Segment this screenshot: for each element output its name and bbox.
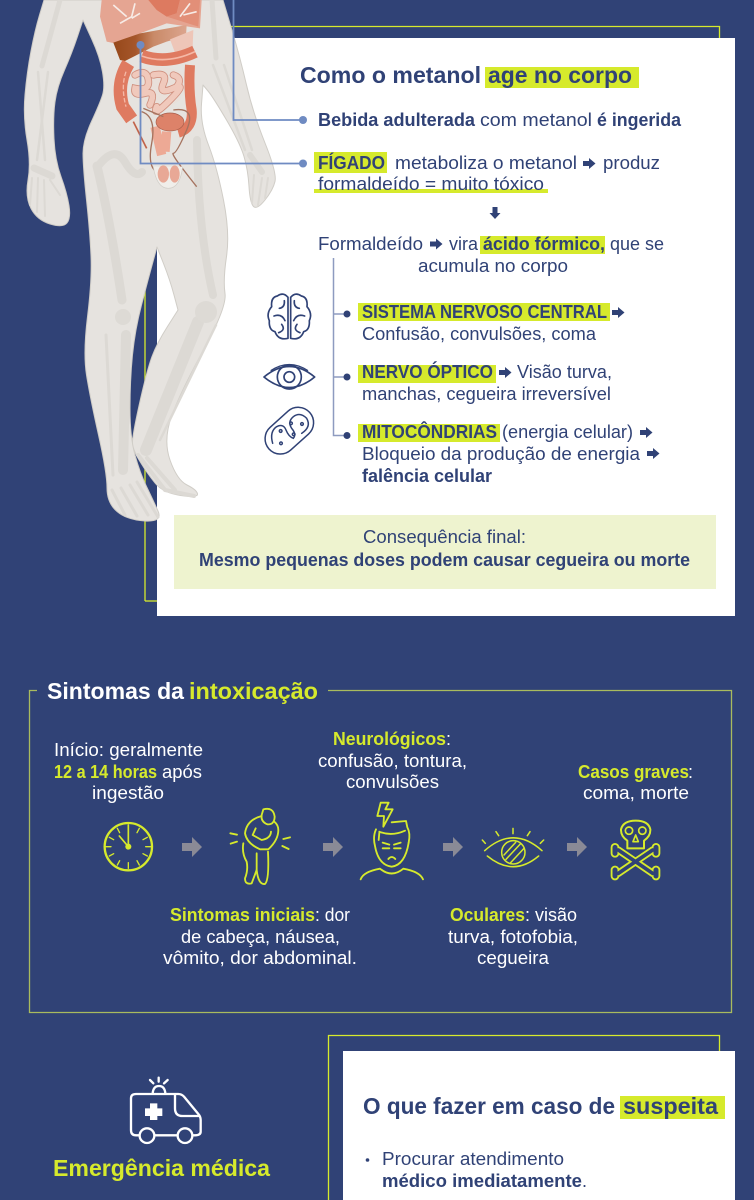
connector lines from organs to text	[136, 0, 307, 168]
text: initial symptoms	[163, 905, 357, 968]
heading: Sintomas da intoxicação: intoxicação	[189, 678, 318, 704]
callout: final consequence: Mesmo pequenas doses podem causar cegueira ou morte	[199, 550, 690, 570]
text: optic nerve: manchas, cegueira irreversível	[362, 384, 611, 404]
text: liver metabolises methanol: metaboliza o metanol	[395, 153, 577, 173]
icon: head with lightning	[361, 803, 423, 879]
text: initial symptoms: vômito, dor abdominal.	[163, 948, 357, 968]
text: initial symptoms: Sintomas iniciais	[170, 905, 315, 925]
text: initial symptoms: de cabeça, náusea,	[181, 927, 340, 947]
icon: eye	[264, 364, 315, 389]
icon: brain	[268, 294, 311, 339]
text: onset: Início: geralmente	[54, 740, 203, 760]
panel: symptoms frame	[30, 690, 732, 1012]
heading: Sintomas da intoxicação: Sintomas da	[47, 678, 184, 704]
text: ocular symptoms: : visão	[525, 905, 577, 925]
organs	[100, 0, 202, 188]
heading: Como o metanol age no corpo	[300, 62, 639, 88]
text: ocular symptoms: turva, fotofobia,	[448, 927, 578, 947]
text: mitochondria	[358, 421, 660, 486]
text: optic nerve: Visão turva,	[517, 362, 612, 382]
text: ingestion: com metanol	[480, 110, 592, 130]
list item: seek medical care	[366, 1149, 587, 1191]
text: severe cases	[578, 762, 693, 803]
heading: what to do in case of suspicion: suspeita	[623, 1093, 718, 1119]
arrow: step 3	[443, 837, 463, 857]
icon: skull and crossbones	[615, 821, 656, 876]
text: formic acid: ácido fórmico,	[483, 234, 605, 254]
text: optic nerve: NERVO ÓPTICO	[362, 361, 493, 382]
icon: eye with impaired vision	[482, 828, 544, 867]
text: optic nerve	[358, 361, 612, 404]
heading: Como o metanol age no corpo: age no corpo	[488, 62, 632, 88]
text: formic acid	[318, 234, 664, 276]
text: neurological symptoms	[318, 729, 467, 792]
text: ocular symptoms: Oculares	[450, 905, 525, 925]
text: ocular symptoms	[448, 905, 578, 968]
text: mitochondria: MITOCÔNDRIAS	[362, 421, 497, 442]
icon: mitochondrion	[259, 401, 320, 460]
heading: Emergência médica: Emergência médica	[53, 1155, 270, 1181]
branching connector to affected systems	[334, 258, 350, 439]
icon: clock	[105, 823, 152, 870]
arrow: step 2	[323, 837, 343, 857]
text: ingestion: Bebida adulterada	[318, 110, 476, 130]
text: initial symptoms: : dor	[315, 905, 350, 925]
panel: what to do	[328, 1036, 735, 1200]
text: onset: ingestão	[92, 783, 164, 803]
text: liver metabolises methanol: FÍGADO	[318, 152, 385, 173]
callout: final consequence: Consequência final:	[363, 527, 526, 547]
text: severe cases: coma, morte	[583, 783, 689, 803]
heading: what to do in case of suspicion: O que fazer em caso de	[363, 1093, 615, 1119]
list item: seek medical care: médico imediatamente	[382, 1171, 582, 1191]
text: mitochondria: Bloqueio da produção de energia	[362, 444, 641, 464]
arrow: step 4	[567, 837, 587, 857]
list item: seek medical care: Procurar atendimento	[382, 1149, 564, 1169]
text: central nervous system	[358, 302, 624, 344]
text: onset: 12 a 14 horas	[54, 762, 157, 782]
text: central nervous system: SISTEMA NERVOSO CENTRAL	[362, 302, 607, 322]
text: mitochondria: falência celular	[362, 466, 492, 486]
heading: Como o metanol age no corpo: Como o metanol	[300, 62, 481, 88]
illustration: human body with skeleton and organs	[24, 0, 275, 521]
text: neurological symptoms: :	[446, 729, 451, 749]
bones	[30, 0, 268, 517]
text: central nervous system: Confusão, convulsões, coma	[362, 324, 597, 344]
text: mitochondria: (energia celular)	[502, 422, 633, 442]
arrow: step 1	[182, 837, 202, 857]
panel: how methanol acts (outline and white card)	[145, 26, 735, 616]
text: formic acid: vira	[449, 234, 479, 254]
text: neurological symptoms: convulsões	[346, 772, 439, 792]
icon: person with abdominal pain	[230, 809, 290, 884]
text: ocular symptoms: cegueira	[477, 948, 550, 968]
heading: Sintomas da intoxicação	[47, 678, 318, 704]
text: formic acid: acumula no corpo	[418, 256, 568, 276]
text: severe cases: Casos graves	[578, 762, 689, 782]
text: onset: após	[162, 762, 202, 782]
text: formic acid: Formaldeído	[318, 234, 423, 254]
callout: final consequence	[174, 515, 716, 589]
text: neurological symptoms: confusão, tontura,	[318, 751, 467, 771]
text: liver metabolises methanol: formaldeído = muito tóxico	[318, 174, 544, 194]
icon: ambulance	[131, 1078, 201, 1143]
text: liver metabolises methanol: produz	[603, 153, 660, 173]
text: neurological symptoms: Neurológicos	[333, 729, 446, 749]
text: formic acid: que se	[610, 234, 664, 254]
arrow: down	[490, 207, 500, 219]
text: onset	[54, 740, 203, 803]
text: ingestion: é ingerida	[597, 110, 682, 130]
text: severe cases: :	[688, 762, 693, 782]
list item: seek medical care: .	[582, 1171, 587, 1191]
text: ingestion	[318, 110, 682, 130]
text: liver metabolises methanol	[314, 152, 660, 194]
